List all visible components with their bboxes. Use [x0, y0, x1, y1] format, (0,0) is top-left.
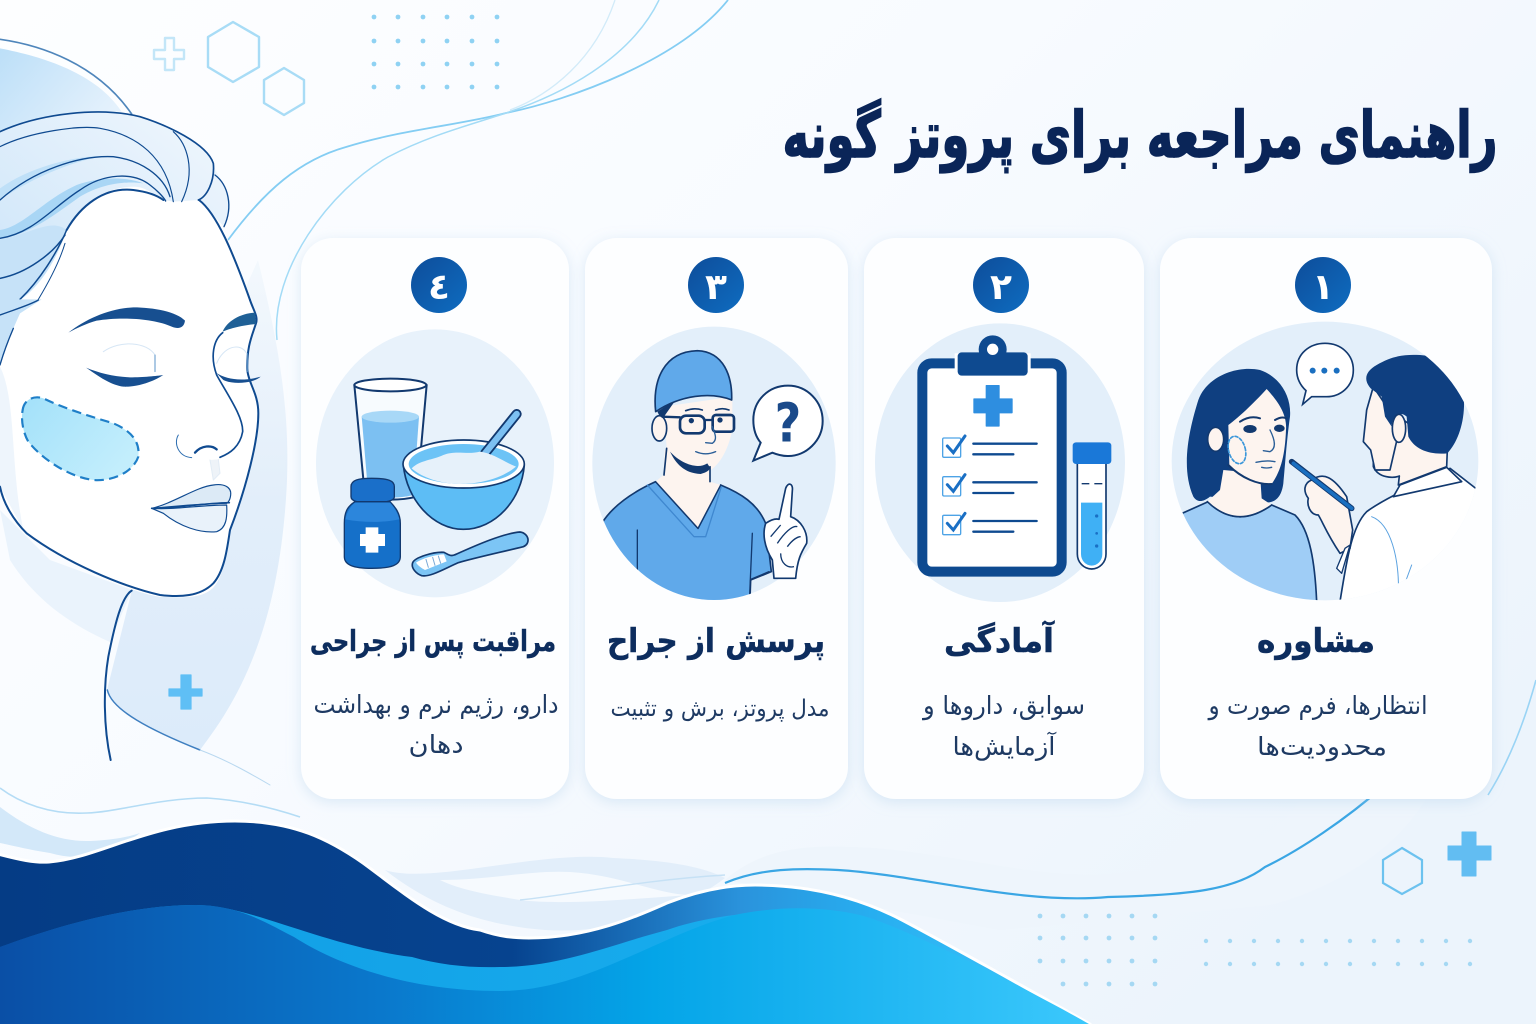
step number 4: [411, 257, 467, 313]
right lower swoosh bands: [725, 785, 1431, 930]
description: post-op care: دارو، رژیم نرم و بهداشت: [314, 690, 558, 720]
description: preparation: [921, 691, 1085, 761]
description: consultation: انتظارها، فرم صورت و: [1207, 691, 1428, 721]
description: post-op care: [314, 690, 558, 759]
panel: step 4 post-op care: [301, 238, 569, 799]
face illustration: [0, 39, 287, 785]
description: preparation: سوابق، داروها و: [921, 691, 1085, 721]
bottom waves: [0, 821, 1090, 1024]
valley swoosh shapes above waves: [385, 857, 725, 931]
eyebrows: [68, 307, 256, 333]
step number 1: [1295, 257, 1351, 313]
illustration: clipboard and test tube: [875, 323, 1125, 602]
description: consultation: [1207, 691, 1428, 762]
bottom right dot grids: [1038, 914, 1472, 986]
step number 2: [973, 257, 1029, 313]
facial features: [0, 299, 261, 596]
illustration: doctor and patient: [1172, 322, 1497, 602]
neck lines: [105, 591, 270, 785]
illustration: water, soft food, medicine, toothbrush: [316, 329, 554, 597]
heading: asking the surgeon: پرسش از جراح: [607, 621, 825, 661]
step number 1: ۱: [1312, 267, 1334, 308]
shaded areas behind neck and face: [0, 260, 287, 750]
illustration: surgeon with question: [592, 327, 836, 607]
step number 4: ٤: [428, 267, 450, 308]
description: preparation: آزمایش‌ها: [952, 731, 1057, 761]
description: consultation: محدودیت‌ها: [1257, 732, 1387, 762]
lips: [152, 485, 231, 532]
step number 3: ۳: [705, 267, 727, 308]
dot grid top: [372, 15, 499, 89]
bottom left light bands: [0, 788, 300, 857]
icon: bottom right hexagon: [1383, 848, 1422, 894]
panel: step 2 preparation: [864, 238, 1144, 799]
cheek implant area: [22, 397, 139, 480]
heading: preparation: آمادگی: [944, 620, 1055, 660]
nose: [176, 333, 243, 480]
illustration: surgeon with question: ?: [775, 392, 801, 455]
hair: [0, 39, 250, 300]
closed eyes: [86, 344, 261, 387]
step number 3: [688, 257, 744, 313]
panel: step 1 consultation: [1160, 238, 1497, 799]
background swoosh lines: [228, 0, 1536, 795]
panel: step 3 asking the surgeon: [585, 238, 848, 799]
icon: plus near neck: [169, 675, 202, 709]
icon: bottom right plus: [1448, 832, 1491, 876]
heading: post-op care: مراقبت پس از جراحی: [310, 624, 556, 659]
face base fill: [0, 187, 258, 597]
decorative top hexagons and plus: [154, 22, 304, 115]
heading: consultation: مشاوره: [1257, 621, 1375, 661]
description: asking the surgeon: مدل پروتز، برش و تثبیت: [610, 696, 830, 722]
description: post-op care: دهان: [408, 730, 464, 759]
step number 2: ۲: [990, 267, 1012, 308]
